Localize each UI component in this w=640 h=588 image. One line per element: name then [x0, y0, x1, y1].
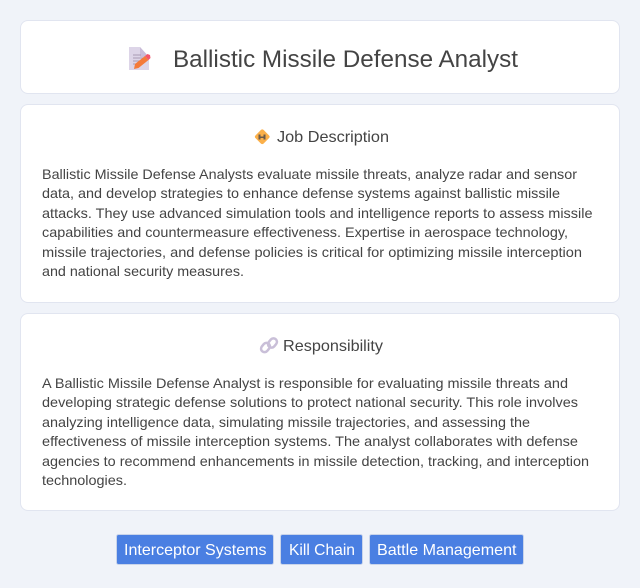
job description text: Ballistic Missile Defense Analysts evaluate missile threats, analyze radar and sensor: [42, 166, 577, 182]
header card: [20, 20, 620, 94]
responsibility text: effectiveness of missile interception systems. The analyst collaborates with defense: [42, 433, 578, 449]
responsibility text: technologies.: [42, 472, 127, 488]
responsibility text: analyzing intelligence data, simulating missile trajectories, and assessing the: [42, 414, 530, 430]
tag: battle management: [370, 534, 524, 564]
job description text: [42, 166, 593, 279]
job description text: missile trajectories, and defense policies is critical for optimizing missile interception: [42, 244, 582, 260]
tag: kill chain: Kill Chain: [289, 542, 355, 559]
job description text: attacks. They use advanced simulation tools and intelligence reports to assess missile: [42, 205, 593, 221]
tag: battle management: Battle Management: [377, 542, 517, 559]
responsibility text: [42, 375, 589, 488]
responsibility text: developing strategic defense solutions to protect national security. This role involves: [42, 394, 578, 410]
responsibility text: agencies to recommend enhancements in missile detection, tracking, and interception: [42, 453, 589, 469]
tag: kill chain: [280, 534, 362, 564]
tag: interceptor systems: [116, 534, 274, 564]
icon: chain link: [260, 337, 278, 354]
job description text: data, and develop strategies to enhance defense systems against ballistic missile: [42, 185, 560, 201]
responsibility panel: [20, 313, 620, 511]
heading: responsibility: Responsibility: [283, 338, 383, 355]
heading: job description: Job Description: [277, 129, 389, 146]
job description text: capabilities and countermeasure effectiveness. Expertise in aerospace technology,: [42, 224, 568, 240]
job description panel: [20, 104, 620, 303]
icon: document with pencil: [129, 47, 150, 70]
job description text: and national security measures.: [42, 263, 244, 279]
icon: warning diamond: [254, 129, 270, 145]
title: Ballistic Missile Defense Analyst: [173, 46, 518, 73]
tag: interceptor systems: Interceptor Systems: [124, 542, 266, 559]
responsibility text: A Ballistic Missile Defense Analyst is responsible for evaluating missile threats and: [42, 375, 568, 391]
